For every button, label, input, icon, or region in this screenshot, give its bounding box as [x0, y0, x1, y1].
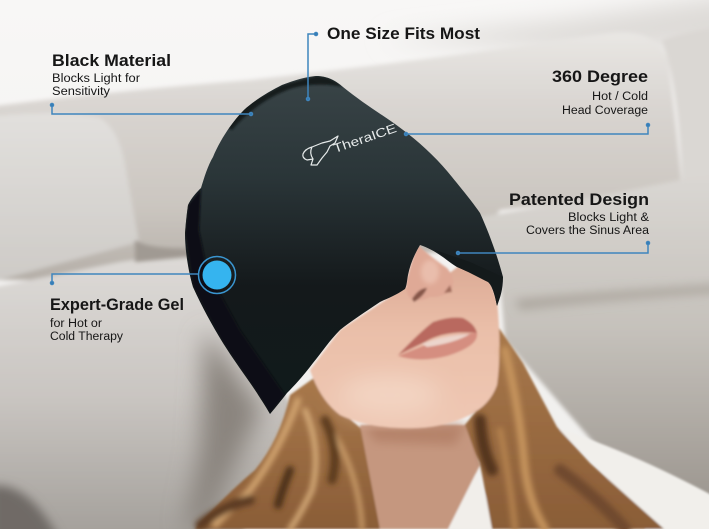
face [310, 265, 500, 428]
callout: Black Material [50, 51, 252, 116]
heading: One Size Fits Most: One Size Fits Most [327, 24, 480, 43]
callout: One Size Fits Most [306, 24, 480, 100]
photo: woman wearing cap [170, 70, 709, 529]
text: Hot / Cold Head Coverage: Hot / Cold [592, 91, 648, 103]
nose [406, 245, 453, 300]
text: for Hot or Cold Therapy: Cold Therapy [50, 331, 123, 343]
lips [398, 318, 477, 355]
leader line [50, 104, 252, 116]
left front pillow [0, 250, 300, 529]
icon: gel dot [198, 256, 236, 294]
text: for Hot or Cold Therapy [50, 318, 123, 343]
text: Blocks Light for Sensitivity: Blocks Light for [52, 73, 140, 85]
leader line [404, 124, 650, 136]
text: Blocks Light & Covers the Sinus Area: Covers the Sinus Area [526, 225, 650, 237]
cap logo: TheraICE: TheraICE [331, 121, 398, 156]
sofa back cushion [0, 32, 682, 280]
text: Hot / Cold Head Coverage: Head Coverage [562, 105, 648, 117]
soft wall shadow [380, 0, 709, 50]
text: Blocks Light for Sensitivity [52, 73, 140, 98]
heading: Expert-Grade Gel: Expert-Grade Gel [50, 295, 184, 314]
callout: Expert-Grade Gel [50, 256, 236, 343]
leader line [306, 32, 318, 100]
callout: 360 Degree [404, 67, 650, 136]
heading: Black Material: Black Material [52, 51, 171, 70]
text: Blocks Light & Covers the Sinus Area [526, 212, 650, 237]
heading: Patented Design: Patented Design [509, 190, 649, 209]
callout: Patented Design [456, 190, 650, 254]
text: Blocks Light for Sensitivity: Sensitivity [52, 86, 110, 98]
left sofa cushion [0, 113, 139, 285]
neck [360, 425, 480, 529]
text: Blocks Light & Covers the Sinus Area: Blocks Light & [568, 212, 649, 224]
white top [555, 428, 709, 529]
leader line [50, 274, 198, 284]
hair [195, 375, 380, 529]
heading: 360 Degree: 360 Degree [552, 67, 648, 86]
leader line [456, 242, 650, 254]
cap body [185, 76, 503, 414]
text: Hot / Cold Head Coverage [562, 91, 648, 117]
text: for Hot or Cold Therapy: for Hot or [50, 318, 102, 330]
cap logo: TheraICE [303, 121, 398, 165]
soft lights and shadows [515, 284, 709, 310]
right front pillow [475, 174, 709, 520]
far right cushion [662, 26, 709, 188]
hair highlights [200, 350, 625, 529]
